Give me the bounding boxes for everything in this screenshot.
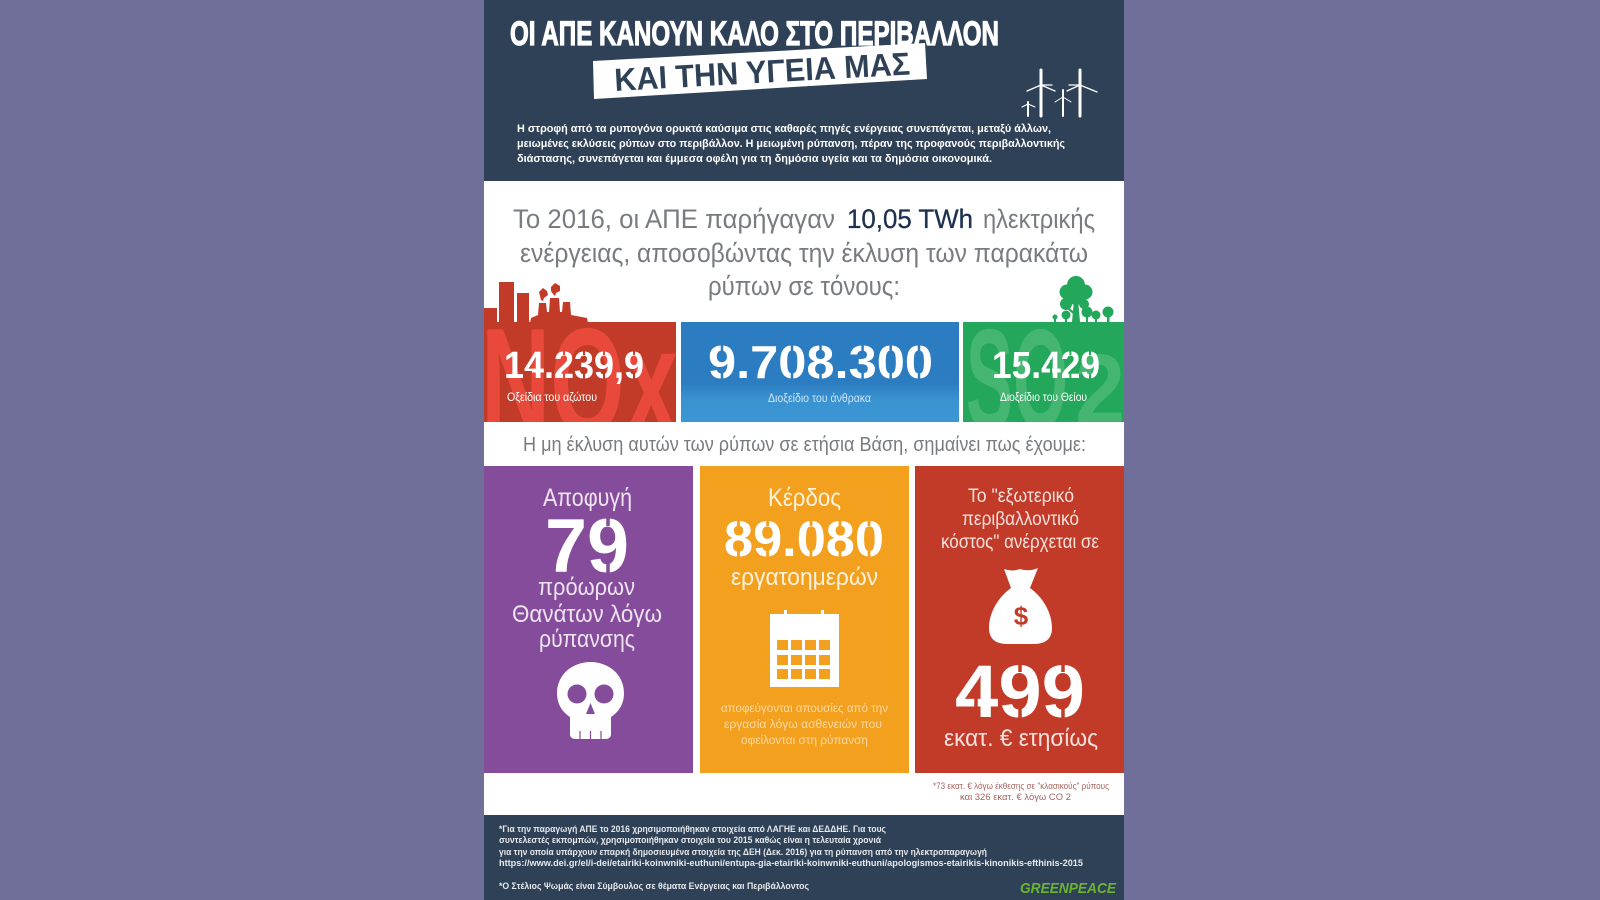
text below: πρόωρων bbox=[538, 574, 635, 601]
background label NOx: NOx bbox=[481, 297, 678, 467]
note: αποφεύγονται απουσίες από την bbox=[721, 701, 888, 715]
text above: Αποφυγή bbox=[543, 484, 632, 512]
text above: Κέρδος bbox=[768, 484, 841, 512]
text below: ρύπανσης bbox=[539, 626, 635, 653]
intro text: Η στροφή από τα ρυπογόνα ορυκτά καύσιμα στις καθαρές πηγές ενέργειας συνεπάγεται, μεταξύ άλλων, bbox=[517, 123, 1051, 135]
panel: SO2 bbox=[963, 322, 1124, 422]
value: 14.239,9 bbox=[504, 345, 644, 387]
text above bbox=[941, 486, 1099, 553]
sources text: *Ο Στέλιος Ψωμάς είναι Σύμβουλος σε θέματα Ενέργειας και Περιβάλλοντος bbox=[499, 881, 809, 892]
text above: κόστος" ανέρχεται σε bbox=[941, 532, 1099, 553]
section heading: Η μη έκλυση αυτών των ρύπων σε ετήσια Βάση, σημαίνει πως έχουμε: bbox=[523, 434, 1086, 456]
intro text: μειωμένες εκλύσεις ρύπων στο περιβάλλον. Η μειωμένη ρύπανση, πέραν της προφανούς περιβαλλοντικής bbox=[517, 138, 1065, 150]
panel: footer bbox=[484, 815, 1124, 900]
note: εργασία λόγω ασθενειών που bbox=[724, 717, 882, 731]
icon: skull bbox=[557, 662, 624, 739]
text below bbox=[512, 574, 662, 653]
panel: header bbox=[484, 0, 1124, 181]
note: οφείλονται στη ρύπανση bbox=[741, 733, 868, 747]
icon: factory skyline bbox=[484, 282, 588, 323]
panel: NOx bbox=[484, 322, 676, 422]
cost footnote: και 326 εκατ. € λόγω CO 2 bbox=[960, 792, 1071, 803]
sources text: https://www.dei.gr/el/i-dei/etairiki-koinwniki-euthuni/entupa-gia-etairiki-koinwniki-euthuni/apologismos-etairikis-kinonikis-efthinis-2015 bbox=[499, 858, 1084, 869]
cost footnote bbox=[933, 781, 1109, 803]
icon: money bag: $ bbox=[1014, 601, 1029, 631]
panel: premature deaths bbox=[484, 466, 693, 773]
panel: external cost bbox=[915, 466, 1124, 773]
sources text: συντελεστές εκπομπών, χρησιμοποιήθηκαν στοιχεία του 2015 καθώς είναι η τελευταία χρονιά bbox=[499, 835, 881, 846]
icon: trees bbox=[1052, 276, 1114, 322]
logo: Greenpeace: GREENPEACE bbox=[1020, 880, 1117, 897]
text below: εκατ. € ετησίως bbox=[944, 725, 1098, 752]
icon: wind turbines bbox=[1022, 70, 1097, 116]
cost footnote: *73 εκατ. € λόγω έκθεσης σε "κλασικούς" ρύπους bbox=[933, 781, 1109, 792]
text below: εργατοημερών bbox=[731, 564, 878, 591]
subtitle banner: ΚΑΙ ΤΗΝ ΥΓΕΙΑ ΜΑΣ bbox=[613, 46, 911, 98]
icon: calendar bbox=[770, 610, 839, 687]
sources text bbox=[499, 824, 1084, 892]
caption: Οξείδια του αζώτου bbox=[507, 390, 597, 404]
text below: Θανάτων λόγω bbox=[512, 601, 662, 628]
panel: working days bbox=[700, 466, 909, 773]
main heading bbox=[513, 204, 1095, 301]
main heading: 10,05 TWh bbox=[847, 204, 973, 234]
caption: Διοξείδιο του άνθρακα bbox=[768, 391, 871, 405]
title: ΟΙ ΑΠΕ ΚΑΝΟΥΝ ΚΑΛΟ ΣΤΟ ΠΕΡΙΒΑΛΛΟΝ bbox=[510, 15, 999, 53]
main heading: ρύπων σε τόνους: bbox=[708, 271, 900, 301]
text above: Το "εξωτερικό bbox=[968, 486, 1074, 507]
value: 89.080 bbox=[724, 511, 884, 567]
background label SO2 bbox=[968, 329, 1122, 422]
background label SO2: 2 bbox=[1075, 334, 1125, 446]
sources text: *Για την παραγωγή ΑΠΕ το 2016 χρησιμοποιήθηκαν στοιχεία από ΛΑΓΗΕ και ΔΕΔΔΗΕ. Για τους bbox=[499, 824, 886, 835]
value: 9.708.300 bbox=[708, 336, 933, 388]
value: 15.429 bbox=[992, 345, 1100, 387]
value: 79 bbox=[545, 504, 629, 589]
main heading: ενέργειας, αποσοβώντας την έκλυση των παρακάτω bbox=[520, 238, 1088, 268]
main heading: ηλεκτρικής bbox=[983, 204, 1095, 234]
intro text bbox=[517, 123, 1065, 165]
value: 499 bbox=[955, 650, 1085, 733]
sources text: για την οποία υπάρχουν επαρκή δημοσιευμένα στοιχεία της ΔΕΗ (Δεκ. 2016) για τη ρύπανση από την ηλεκτροπαραγωγή bbox=[499, 847, 987, 858]
background label SO2: SO bbox=[966, 300, 1068, 459]
note bbox=[721, 701, 888, 747]
text above: περιβαλλοντικό bbox=[962, 509, 1079, 530]
icon: money bag bbox=[989, 568, 1052, 644]
intro text: διάστασης, συνεπάγεται και έμμεσα οφέλη για τη δημόσια υγεία και τα δημόσια οικονομικά. bbox=[517, 153, 992, 165]
caption: Διοξείδιο του Θείου bbox=[1000, 390, 1087, 404]
main heading: Το 2016, οι ΑΠΕ παρήγαγαν bbox=[513, 204, 835, 234]
panel: CO2 bbox=[681, 322, 959, 422]
